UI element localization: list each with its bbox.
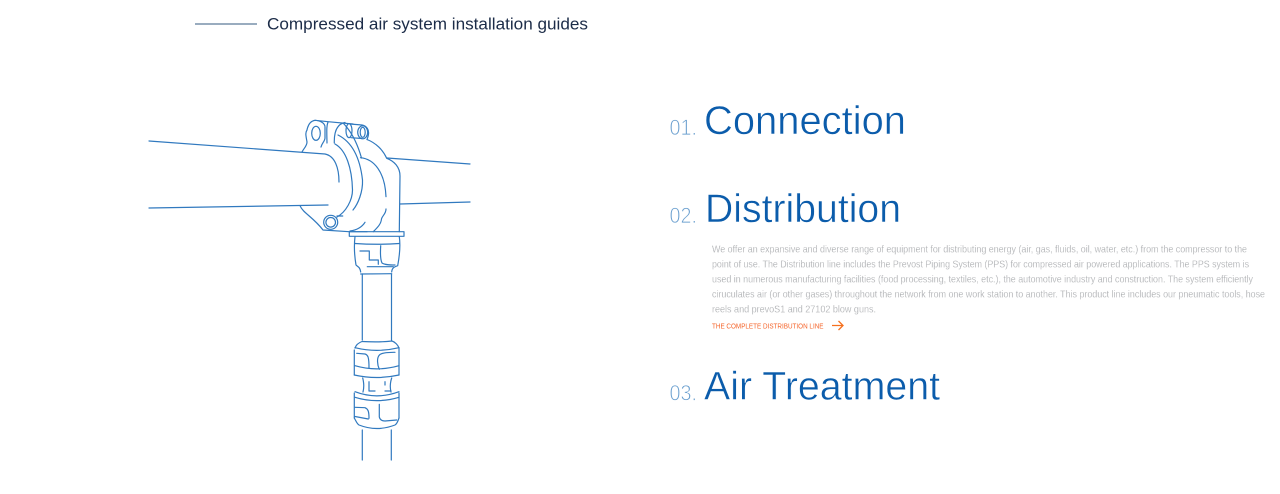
main pipe left xyxy=(149,141,339,208)
lower ring fitting xyxy=(354,392,399,428)
pipe illustration xyxy=(149,120,470,460)
body text xyxy=(712,244,1265,316)
coupling xyxy=(349,232,404,274)
section 01: Connection xyxy=(704,99,906,143)
neck xyxy=(363,378,392,392)
section 03: Air Treatment xyxy=(704,364,940,408)
icon: arrow xyxy=(832,321,843,330)
link: THE COMPLETE DISTRIBUTION LINE xyxy=(712,324,824,330)
body text: reels and prevoS1 and 27102 blow guns. xyxy=(712,304,876,316)
section 02: Distribution xyxy=(705,187,901,231)
section 02: 02. xyxy=(670,203,697,228)
main pipe right xyxy=(387,158,470,204)
section 03: 03. xyxy=(670,380,697,406)
upper ring fitting xyxy=(354,341,399,378)
link xyxy=(712,321,843,330)
section 01: 01. xyxy=(670,115,697,140)
header: Compressed air system installation guides xyxy=(267,14,588,34)
clamp xyxy=(300,120,400,232)
tube xyxy=(362,274,392,460)
